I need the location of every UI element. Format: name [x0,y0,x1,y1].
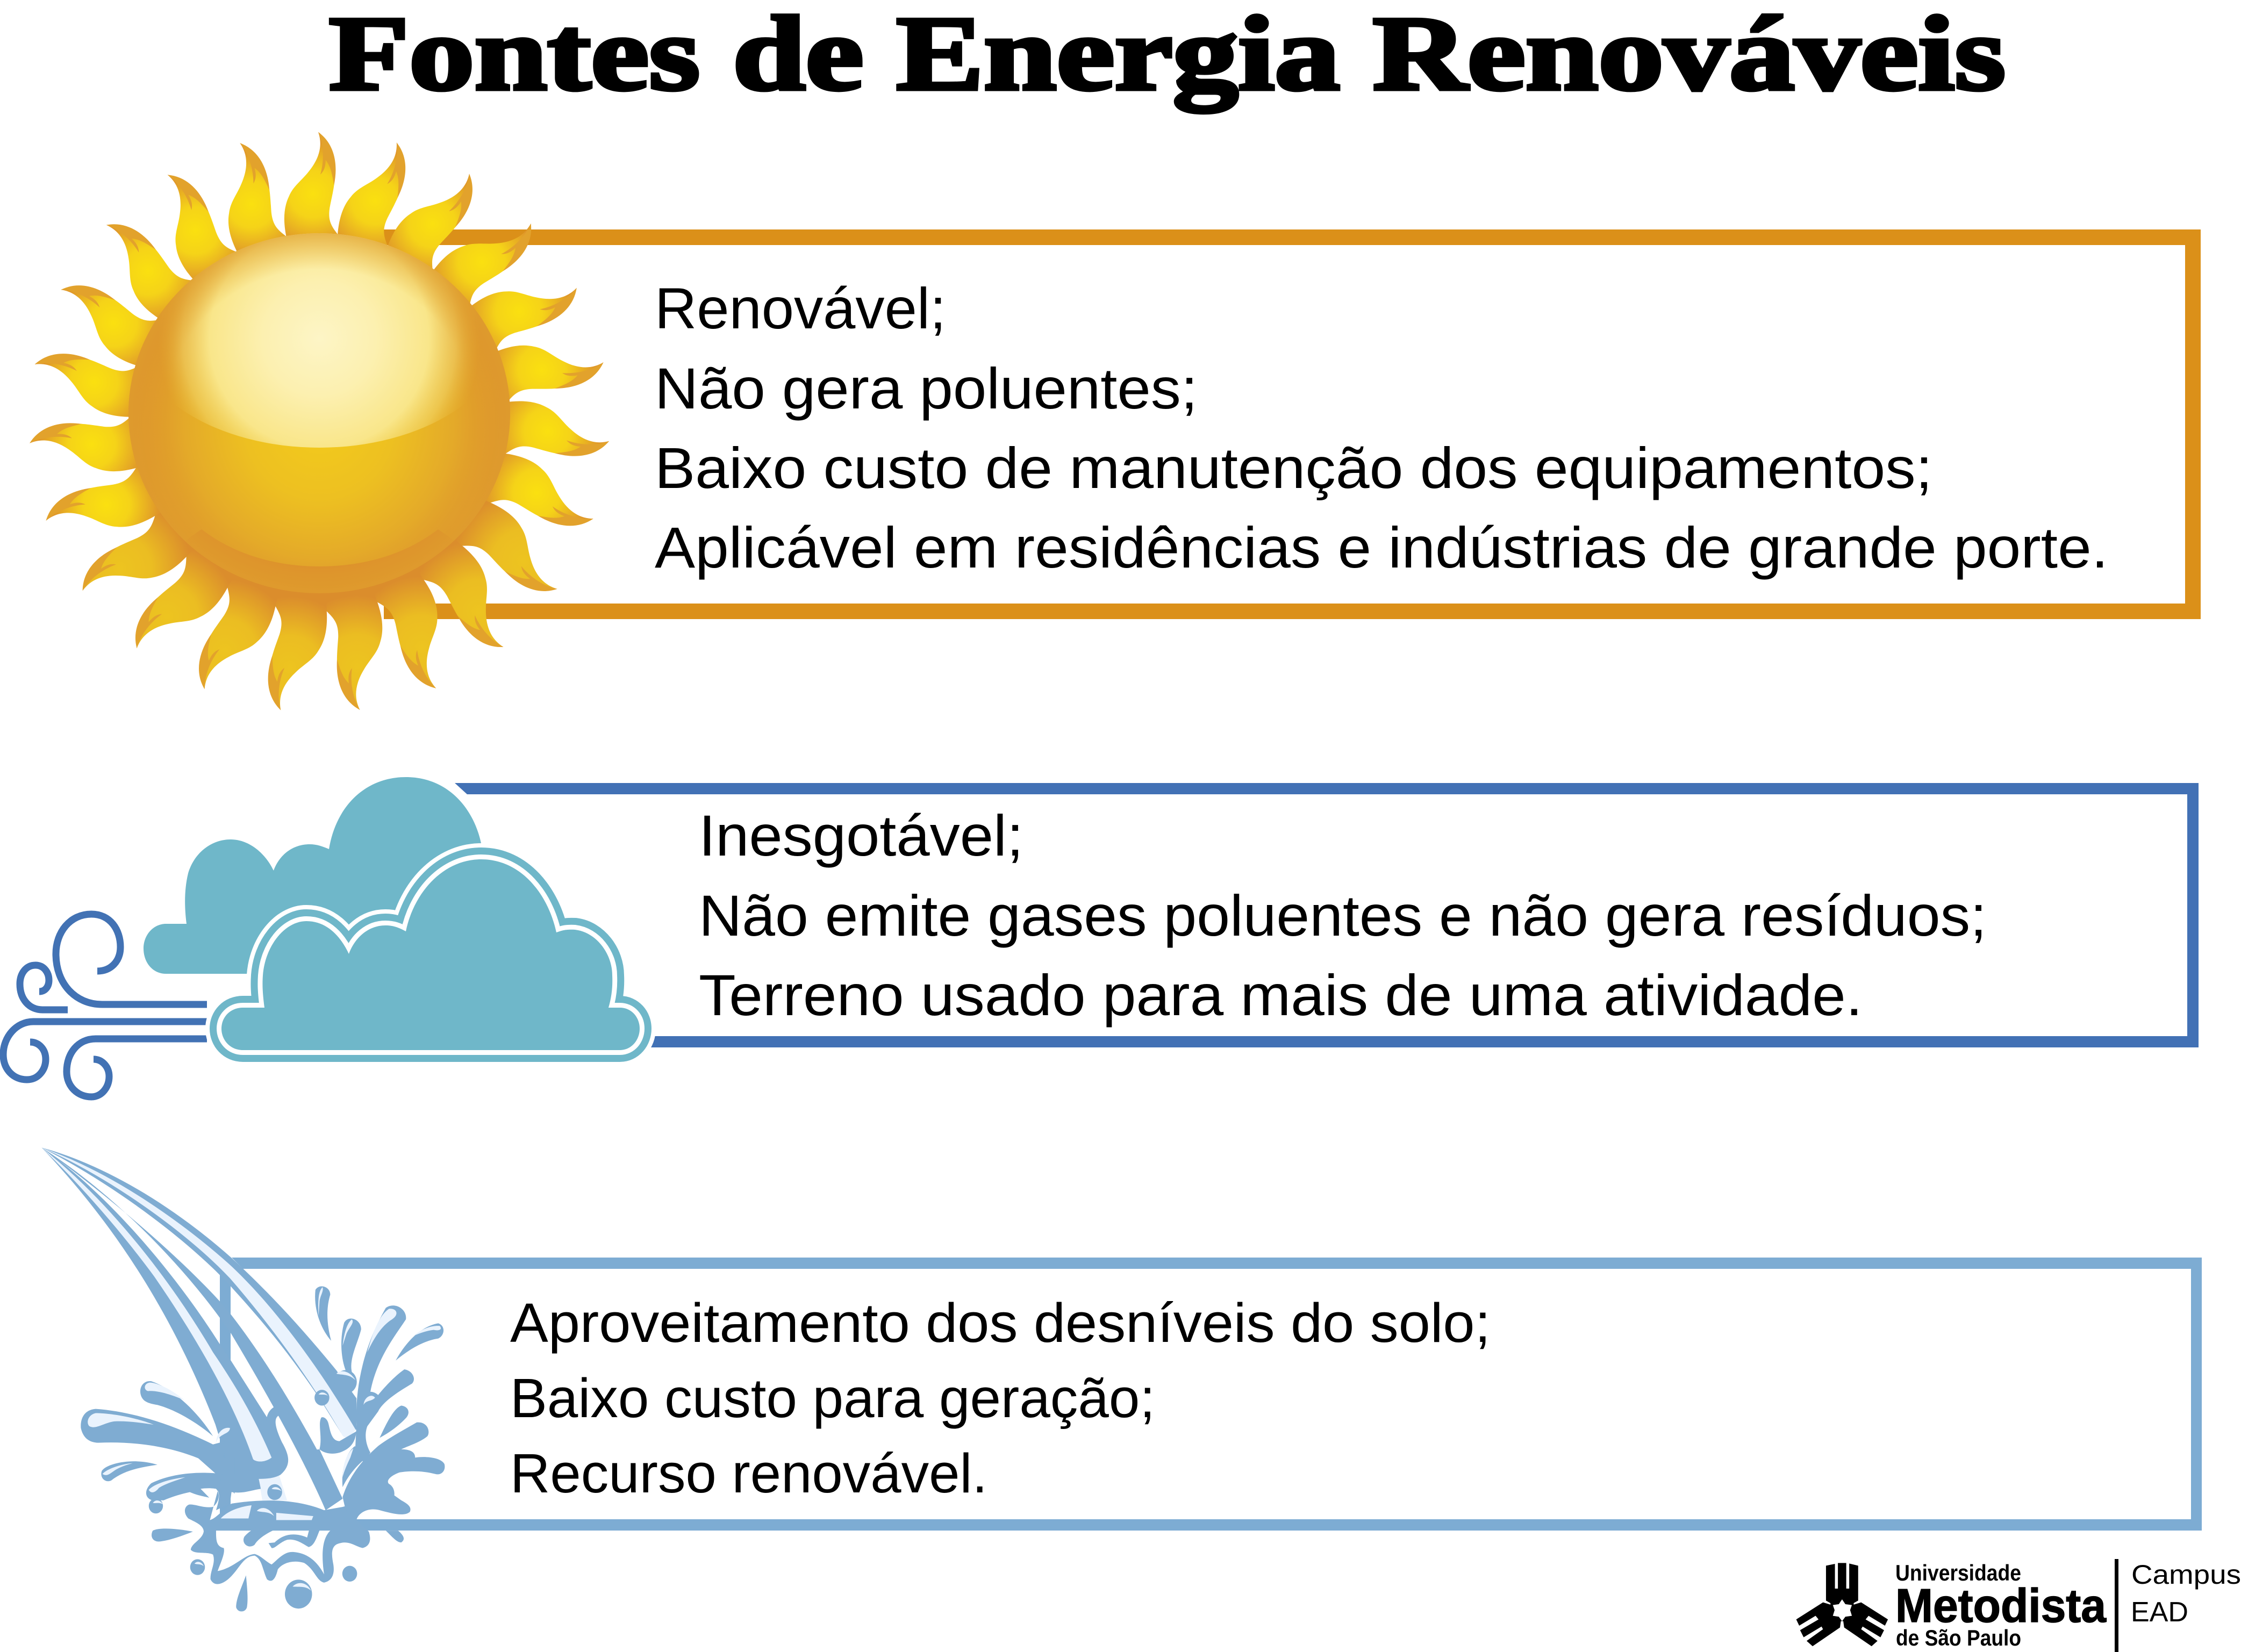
text block: solar energy: Baixo custo de manutenção dos equipamentos; [655,435,1932,500]
panel: hydro [42,1148,2202,1612]
water droplets [149,1370,376,1608]
middle stream [42,1148,342,1510]
logo: Universidade Metodista [1796,1559,2241,1652]
water highlights [42,1148,355,1500]
right stream [42,1148,356,1433]
icon: waterfall splash [42,1148,445,1612]
open centre of splash pool [213,1531,330,1575]
text block: wind energy: Terreno usado para mais de uma atividade. [699,963,1863,1028]
pool wave [269,1520,319,1548]
logo text: Metodista: Metodista [1895,1579,2107,1632]
text block: wind energy: Inesgotável; [699,803,1023,868]
icon: front cloud [221,859,640,1050]
logo text: EAD: EAD [2131,1597,2188,1628]
text block: solar energy: Aplicável em residências e indústrias de grande porte. [655,515,2108,580]
text block: solar energy [655,276,2108,580]
text block: solar energy: Não gera poluentes; [655,356,1198,421]
logo text: Campus: Campus [2131,1560,2241,1590]
panel frame: wind [455,783,2199,1047]
text block: wind energy: Não emite gases poluentes e não gera resíduos; [699,883,1987,948]
text block: hydro energy [510,1292,1491,1504]
text block: hydro energy: Baixo custo para geração; [510,1367,1155,1429]
icon: wind swirls [3,914,207,1097]
logo text: de São Paulo: de São Paulo [1896,1625,2021,1650]
text block: solar energy: Renovável; [655,276,946,341]
icon: back cloud [144,777,481,974]
logo divider [2115,1559,2118,1652]
left stream [42,1148,285,1477]
panel: solar [28,132,2201,715]
panel frame: solar [384,229,2201,619]
pool drop arm [244,1525,289,1547]
text block: hydro energy: Aproveitamento dos desníveis do solo; [510,1292,1491,1354]
icon: sun [28,132,611,715]
splash arms [81,1409,225,1471]
logo text: Universidade: Universidade [1895,1560,2021,1585]
text block: hydro energy: Recurso renovável. [510,1442,987,1504]
text block: wind energy [699,803,1987,1028]
logo emblem [1796,1563,1888,1646]
panel frame: hydro [220,1258,2202,1531]
pool highlights [88,1287,441,1520]
panel: wind [3,777,2199,1097]
